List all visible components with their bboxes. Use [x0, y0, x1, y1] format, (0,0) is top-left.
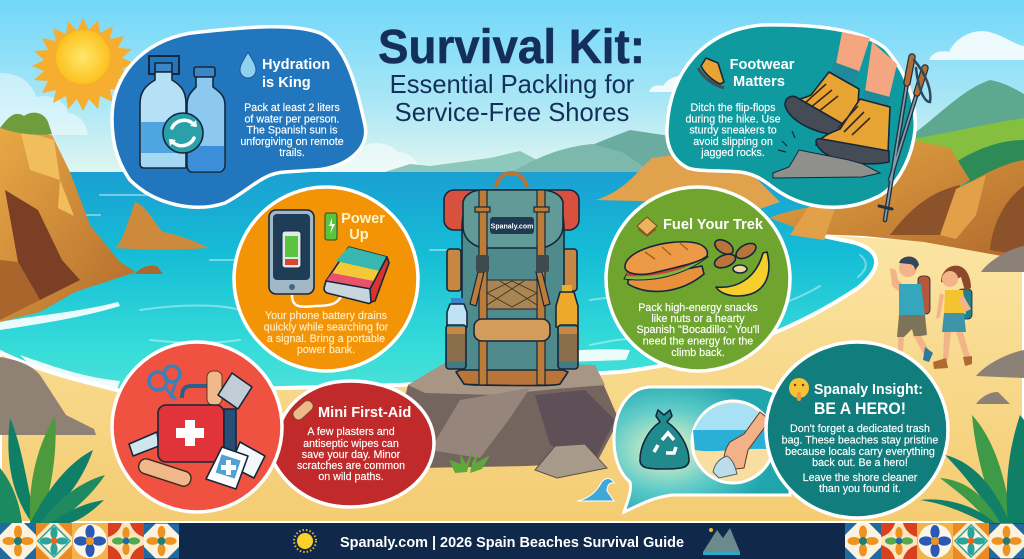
heading [730, 57, 795, 90]
icon: bocadillo sandwich [624, 242, 708, 291]
background: wave highlights [30, 195, 866, 345]
icon: smartphone [269, 210, 314, 294]
icon: water drop [240, 52, 256, 78]
handle [496, 173, 527, 188]
icon: shushing face emoji [789, 378, 809, 401]
text block: save your day. Minor [302, 449, 401, 461]
icon: footer sun [294, 530, 316, 552]
icon: banana [716, 252, 769, 296]
panel: hydration [112, 27, 366, 207]
icon: sun [32, 18, 134, 111]
background: left cliff [0, 113, 209, 322]
text block: sturdy sneakers to [689, 124, 777, 136]
woman hiker [933, 266, 972, 369]
text block: power bank. [297, 344, 355, 356]
text block: Your phone battery drains [265, 310, 387, 322]
background: clouds [0, 31, 1024, 172]
background: shore foam [0, 302, 630, 393]
background: sea [0, 172, 1024, 422]
icon: small battery [325, 213, 337, 240]
heading [262, 57, 330, 91]
text block: than you found it. [819, 483, 901, 495]
text block: avoid slipping on [693, 136, 773, 148]
background: distant mountains [385, 80, 1024, 172]
brand label [490, 217, 534, 234]
text block: back out. Be a hero! [812, 457, 908, 469]
decoration: right plant [920, 415, 1024, 523]
panel: mini first-aid [112, 342, 434, 512]
flap [463, 190, 563, 248]
panel: fuel your trek [606, 187, 790, 371]
brand label: Spanaly.com [491, 224, 533, 230]
icon: small sandwich [637, 217, 657, 236]
title: Essential Packling for [390, 71, 635, 99]
text block: A few plasters and [307, 426, 395, 438]
icon: plaster [291, 399, 315, 422]
icon: wave [577, 478, 614, 501]
heading: Matters [733, 74, 785, 90]
text block: antiseptic wipes can [303, 438, 399, 450]
heading: Hydration [262, 57, 330, 73]
straps [470, 190, 550, 385]
mesh side pockets [446, 325, 578, 369]
sleeping roll [444, 190, 579, 230]
icon: power bank [324, 247, 389, 303]
icon: water bottles [140, 56, 225, 172]
text block: Spanish "Bocadillo." You'll [636, 324, 760, 336]
heading [814, 382, 923, 418]
text block: a signal. Bring a portable [267, 333, 385, 345]
heading: Fuel Your Trek [663, 217, 764, 233]
text block: because locals carry everything [785, 446, 935, 458]
panel: spanaly insight [614, 342, 948, 518]
body [462, 190, 564, 385]
icon: charging cable [292, 295, 342, 307]
tiles: right [845, 523, 1024, 559]
speech bubble [614, 387, 790, 512]
grass [449, 450, 490, 473]
illustration: backpack on rock [397, 173, 619, 478]
text block: bag. These beaches stay pristine [782, 434, 938, 446]
tiles: left [0, 523, 179, 559]
text block: Ditch the flip-flops [691, 102, 775, 114]
background: beach rocks [976, 246, 1024, 404]
heading: Up [349, 227, 369, 243]
text block [636, 302, 760, 359]
panel: power up [234, 187, 418, 371]
rock boulder [535, 444, 607, 478]
text block: Pack at least 2 liters [244, 102, 340, 114]
icon: trekking poles [879, 57, 930, 220]
text block: jagged rocks. [700, 147, 765, 159]
icon: nuts [712, 237, 759, 273]
background: sky [0, 0, 1024, 180]
title: Survival Kit: [378, 21, 645, 74]
heading: Spanaly Insight: [814, 382, 923, 398]
text block: The Spanish sun is [247, 124, 337, 136]
icon: boot [698, 58, 724, 88]
footer banner [0, 523, 1024, 559]
front pocket flap [474, 319, 550, 341]
text block [685, 102, 781, 159]
illustration: hikers [890, 256, 972, 369]
water bottles [447, 285, 578, 327]
background: right cliffs and hill [596, 118, 1024, 260]
text block: Don't forget a dedicated trash [790, 423, 930, 435]
heading: BE A HERO! [814, 399, 906, 418]
background: sand beach [0, 232, 1024, 523]
text block: Leave the shore cleaner [803, 472, 918, 484]
background: lower left rock [0, 357, 96, 435]
insight circle [766, 342, 948, 518]
text block [297, 426, 405, 483]
footer text: Spanaly.com | 2026 Spain Beaches Survival Guide [340, 534, 684, 551]
heading [341, 211, 385, 243]
title: Service-Free Shores [395, 99, 629, 127]
text block: on wild paths. [318, 471, 384, 483]
panel: footwear [667, 25, 915, 207]
text block: Pack high-energy snacks [638, 302, 758, 314]
text block: unforgiving on remote [240, 136, 344, 148]
text block: of water per person. [244, 114, 340, 126]
heading: Footwear [730, 57, 795, 73]
mesh pocket [487, 280, 537, 309]
heading: is King [262, 75, 311, 91]
text block: need the energy for the [643, 336, 753, 348]
text block: trails. [279, 147, 305, 159]
heading: Power [341, 211, 385, 227]
man hiker [890, 256, 933, 362]
text block: during the hike. Use [685, 114, 781, 126]
text block [264, 310, 389, 356]
icon: footer mountains [703, 528, 740, 555]
text block: climb back. [671, 347, 725, 359]
decoration: left plant [0, 416, 105, 523]
text block: like nuts or a hearty [651, 313, 745, 325]
text block [782, 423, 938, 495]
side pockets [447, 249, 461, 291]
beach scene circle [692, 401, 774, 483]
heading: Mini First-Aid [318, 405, 411, 421]
illustration: hiking legs and boots [773, 32, 897, 178]
text block: scratches are common [297, 460, 405, 472]
text block [240, 102, 344, 159]
rock [397, 363, 619, 468]
icon: trash bag [640, 410, 689, 469]
text block: quickly while searching for [264, 322, 389, 334]
illustration: first aid kit [129, 366, 265, 489]
title [378, 21, 645, 127]
